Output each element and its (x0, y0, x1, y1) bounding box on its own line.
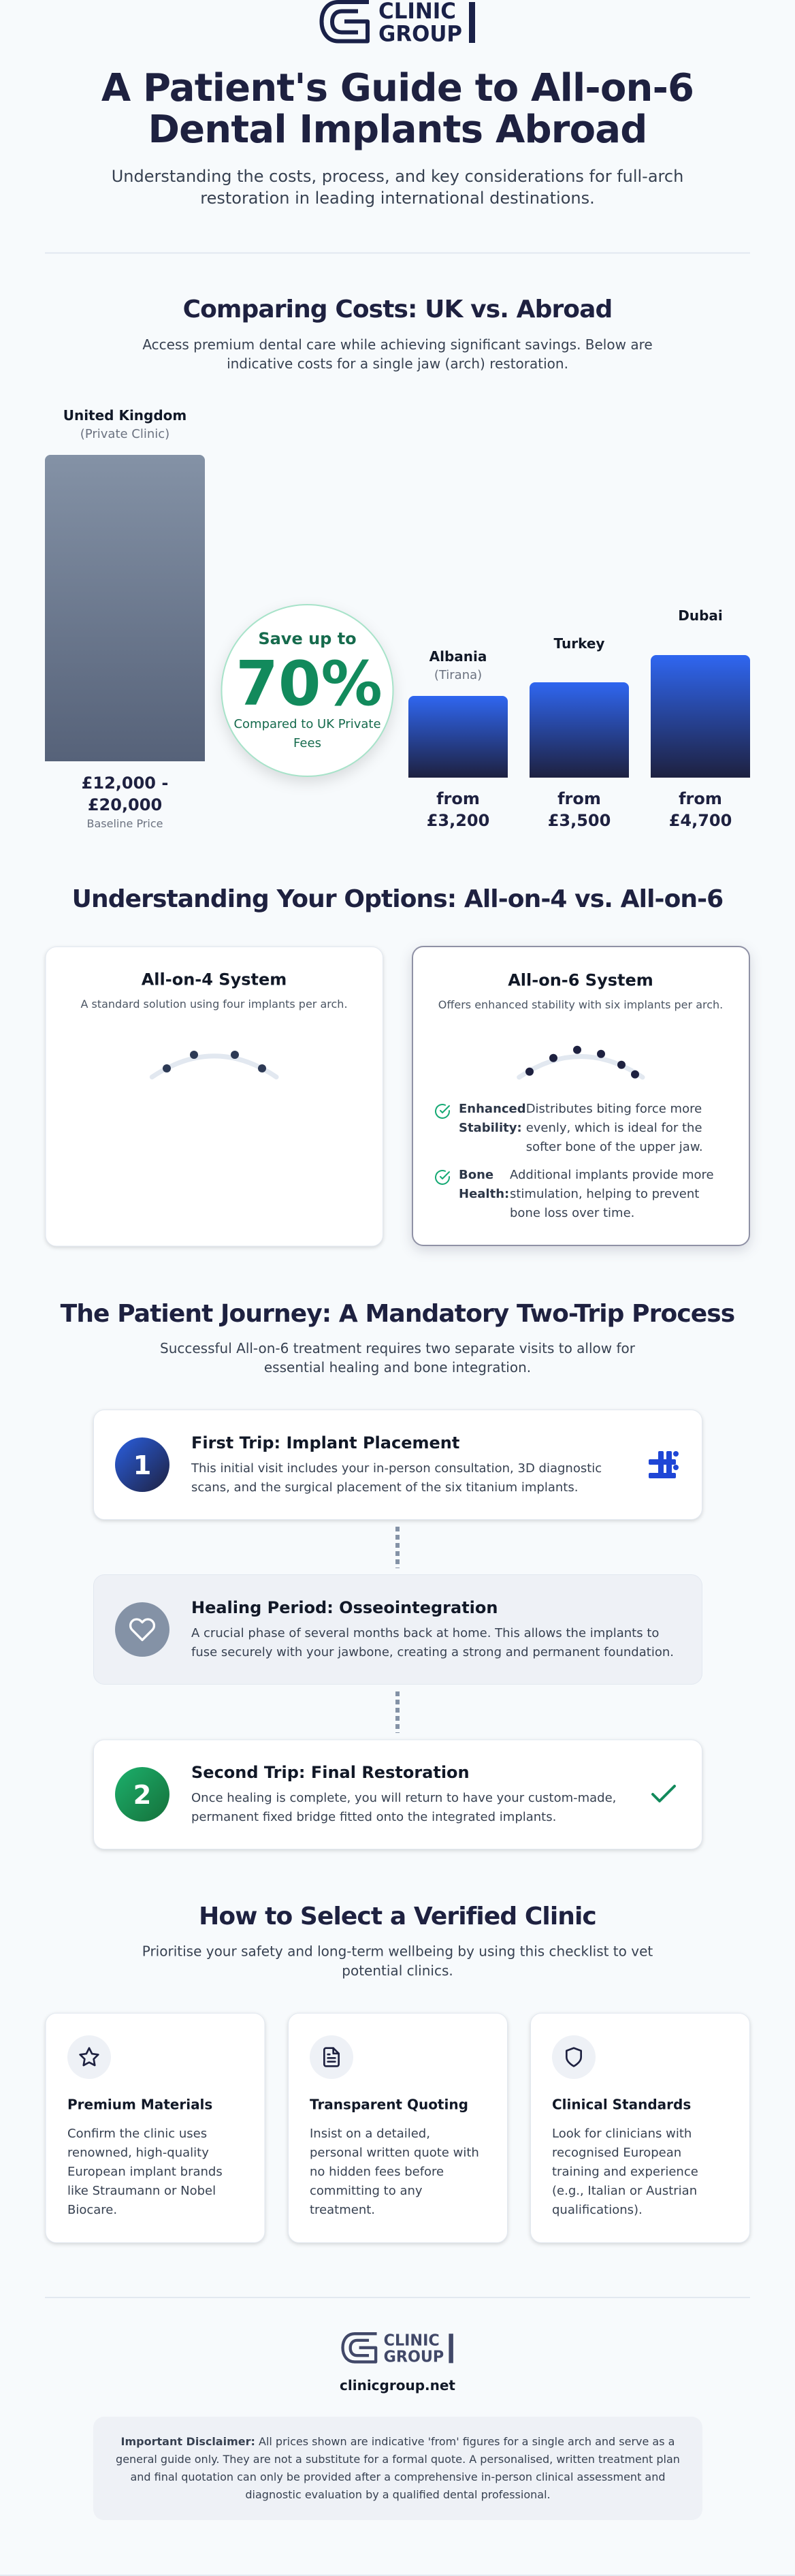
checklist intro text: Prioritise your safety and long-term wellbeing by using this checklist to vet (142, 1943, 653, 1960)
icon: check (653, 1786, 675, 1801)
callout: save up to 70% (222, 605, 393, 776)
panel: premium materials: renowned, high-quality (67, 2146, 209, 2160)
bar: Dubai: from (679, 789, 722, 808)
footer logo: GROUP (384, 2349, 444, 2366)
bar: United Kingdom: United Kingdom (63, 407, 186, 424)
step: first trip: This initial visit includes your in-person consultation, 3D diagnostic (191, 1461, 602, 1476)
bar: Albania: £3,200 (427, 811, 489, 830)
benefit: enhanced stability: evenly, which is ideal for the (526, 1121, 702, 1135)
panel: premium materials: Premium Materials (67, 2096, 212, 2112)
benefit: bone health: bone loss over time. (510, 1206, 634, 1220)
diagram: six implants (519, 1046, 643, 1079)
journey intro text (160, 1340, 636, 1376)
panel: premium materials (46, 2013, 265, 2243)
panel: clinical standards (531, 2013, 750, 2243)
benefit: enhanced stability (436, 1102, 703, 1154)
step: healing period (94, 1574, 702, 1685)
bar: Dubai: Dubai (678, 607, 723, 624)
connector (395, 1527, 400, 1568)
step: second trip: permanent fixed bridge fitted onto the integrated implants. (191, 1810, 556, 1824)
disclaimer: Important Disclaimer: All prices shown are indicative 'from' figures for a single arch and serve as a (121, 2435, 675, 2448)
benefit: bone health: Additional implants provide more (510, 1168, 714, 1182)
benefit: enhanced stability: softer bone of the upper jaw. (526, 1140, 703, 1154)
benefit: enhanced stability: Distributes biting force more (526, 1102, 702, 1116)
icon: implant (649, 1451, 679, 1478)
icon: star (80, 2048, 98, 2065)
bar: United Kingdom: £20,000 (88, 795, 162, 814)
panel: transparent quoting: Insist on a detailed, (310, 2127, 430, 2141)
panel: All-on-4: A standard solution using four implants per arch. (80, 998, 348, 1011)
callout: save up to 70%: 70% (236, 648, 383, 720)
benefit: enhanced stability: Stability: (459, 1121, 522, 1135)
title: A Patient's Guide to All-on-6 (101, 66, 694, 110)
benefit: bone health: Bone (459, 1168, 493, 1182)
panel: All-on-6: All-on-6 System (508, 971, 653, 990)
header logo (321, 0, 475, 46)
bar: Dubai: £4,700 (669, 811, 732, 830)
panel: clinical standards: training and experience (552, 2165, 698, 2179)
panel: premium materials: like Straumann or Nobel (67, 2184, 216, 2198)
cost intro text: Access premium dental care while achieving significant savings. Below are (142, 336, 653, 353)
panel: clinical standards: recognised European (552, 2146, 681, 2160)
panel: All-on-6: Offers enhanced stability with six implants per arch. (438, 998, 723, 1011)
callout: save up to 70%: Compared to UK Private (233, 717, 381, 731)
connector (395, 1691, 400, 1733)
panel: transparent quoting (289, 2013, 508, 2243)
step: first trip: First Trip: Implant Placement (191, 1433, 459, 1452)
checklist intro text: potential clinics. (342, 1962, 453, 1979)
panel: transparent quoting: personal written quote with (310, 2146, 479, 2160)
bar: United Kingdom: (Private Clinic) (80, 427, 169, 441)
bar: Albania: Albania (429, 648, 487, 665)
panel: premium materials: Biocare. (67, 2203, 117, 2217)
bar: Albania: from (436, 789, 480, 808)
bar: Albania (408, 648, 508, 830)
step: second trip: Once healing is complete, you will return to have your custom-made, (191, 1791, 616, 1805)
heading: patient journey: The Patient Journey: A Mandatory Two-Trip Process (61, 1300, 734, 1328)
bar: Turkey: from (557, 789, 601, 808)
panel: transparent quoting: treatment. (310, 2203, 375, 2217)
bar: Turkey (530, 635, 629, 830)
disclaimer: diagnostic evaluation by a qualified dental professional. (245, 2488, 551, 2501)
step: healing period: Healing Period: Osseointegration (191, 1598, 498, 1617)
step: healing period: A crucial phase of several months back at home. This allows the implants to (191, 1626, 659, 1640)
section: options (46, 885, 749, 1246)
footer logo: CLINIC (384, 2332, 440, 2349)
callout: save up to 70%: Save up to (258, 629, 357, 648)
subtitle (112, 167, 683, 208)
panel: premium materials: Confirm the clinic uses (67, 2127, 207, 2141)
step: healing period: fuse securely with your jawbone, creating a strong and permanent foundation. (191, 1645, 674, 1659)
subtitle: restoration in leading international destinations. (200, 189, 595, 208)
icon: document (324, 2048, 339, 2066)
header logo: GROUP (378, 20, 462, 46)
journey intro text: Successful All-on-6 treatment requires two separate visits to allow for (160, 1340, 636, 1356)
panel: transparent quoting: no hidden fees before (310, 2165, 444, 2179)
panel: transparent quoting: Transparent Quoting (310, 2096, 468, 2112)
bar: United Kingdom: £12,000 - (82, 774, 168, 793)
panel: All-on-4 (46, 947, 383, 1246)
bar: Dubai (651, 607, 750, 830)
step: first trip (94, 1410, 702, 1520)
disclaimer (93, 2417, 702, 2520)
benefit: bone health (436, 1168, 714, 1220)
section: verified clinic (46, 1903, 750, 2243)
icon: shield (566, 2048, 581, 2066)
heading: comparing costs: Comparing Costs: UK vs. Abroad (183, 296, 612, 323)
bar: Turkey: Turkey (554, 635, 604, 652)
step: second trip: Second Trip: Final Restoration (191, 1763, 470, 1782)
bar: United Kingdom: Baseline Price (87, 817, 163, 830)
disclaimer: general guide only. They are not a substitute for a formal quote. A personalised, written treatment plan (116, 2453, 680, 2466)
callout: save up to 70%: Fees (293, 736, 321, 750)
title (101, 66, 694, 152)
cost intro text (142, 336, 653, 372)
benefit: enhanced stability: Enhanced (459, 1102, 526, 1116)
heading: understanding options: Understanding Your Options: All-on-4 vs. All-on-6 (72, 885, 723, 913)
panel: clinical standards: (e.g., Italian or Austrian (552, 2184, 697, 2198)
panel: premium materials: European implant brands (67, 2165, 223, 2179)
step: second trip (94, 1740, 702, 1849)
step: second trip: 2 (133, 1780, 151, 1811)
cost intro text: indicative costs for a single jaw (arch) restoration. (227, 355, 568, 372)
bar: Albania: (Tirana) (434, 668, 482, 682)
icon: heart (131, 1619, 154, 1640)
heading: select a clinic: How to Select a Verified Clinic (199, 1903, 596, 1930)
footer website: clinicgroup.net (340, 2377, 455, 2394)
footer logo (343, 2332, 453, 2366)
panel: All-on-6 (412, 947, 749, 1245)
bar: United Kingdom (45, 407, 205, 830)
step: first trip: 1 (133, 1450, 151, 1481)
checklist intro text (142, 1943, 653, 1979)
panel: transparent quoting: committing to any (310, 2184, 423, 2198)
panel: clinical standards: Look for clinicians with (552, 2127, 692, 2141)
step: first trip: scans, and the surgical placement of the six titanium implants. (191, 1480, 578, 1495)
title: Dental Implants Abroad (148, 108, 647, 152)
diagram: four implants (152, 1051, 276, 1077)
panel: All-on-4: All-on-4 System (142, 970, 287, 989)
benefit: bone health: stimulation, helping to prevent (510, 1187, 699, 1201)
bar: Turkey: £3,500 (548, 811, 611, 830)
section: cost comparison (45, 296, 750, 830)
benefit: bone health: Health: (459, 1187, 509, 1201)
panel: clinical standards: Clinical Standards (552, 2096, 691, 2112)
section: patient journey (61, 1300, 734, 1849)
subtitle: Understanding the costs, process, and key considerations for full-arch (112, 167, 683, 186)
disclaimer: and final quotation can only be provided after a comprehensive in-person clinical assessment and (130, 2470, 666, 2483)
panel: clinical standards: qualifications). (552, 2203, 643, 2217)
journey intro text: essential healing and bone integration. (264, 1359, 531, 1376)
